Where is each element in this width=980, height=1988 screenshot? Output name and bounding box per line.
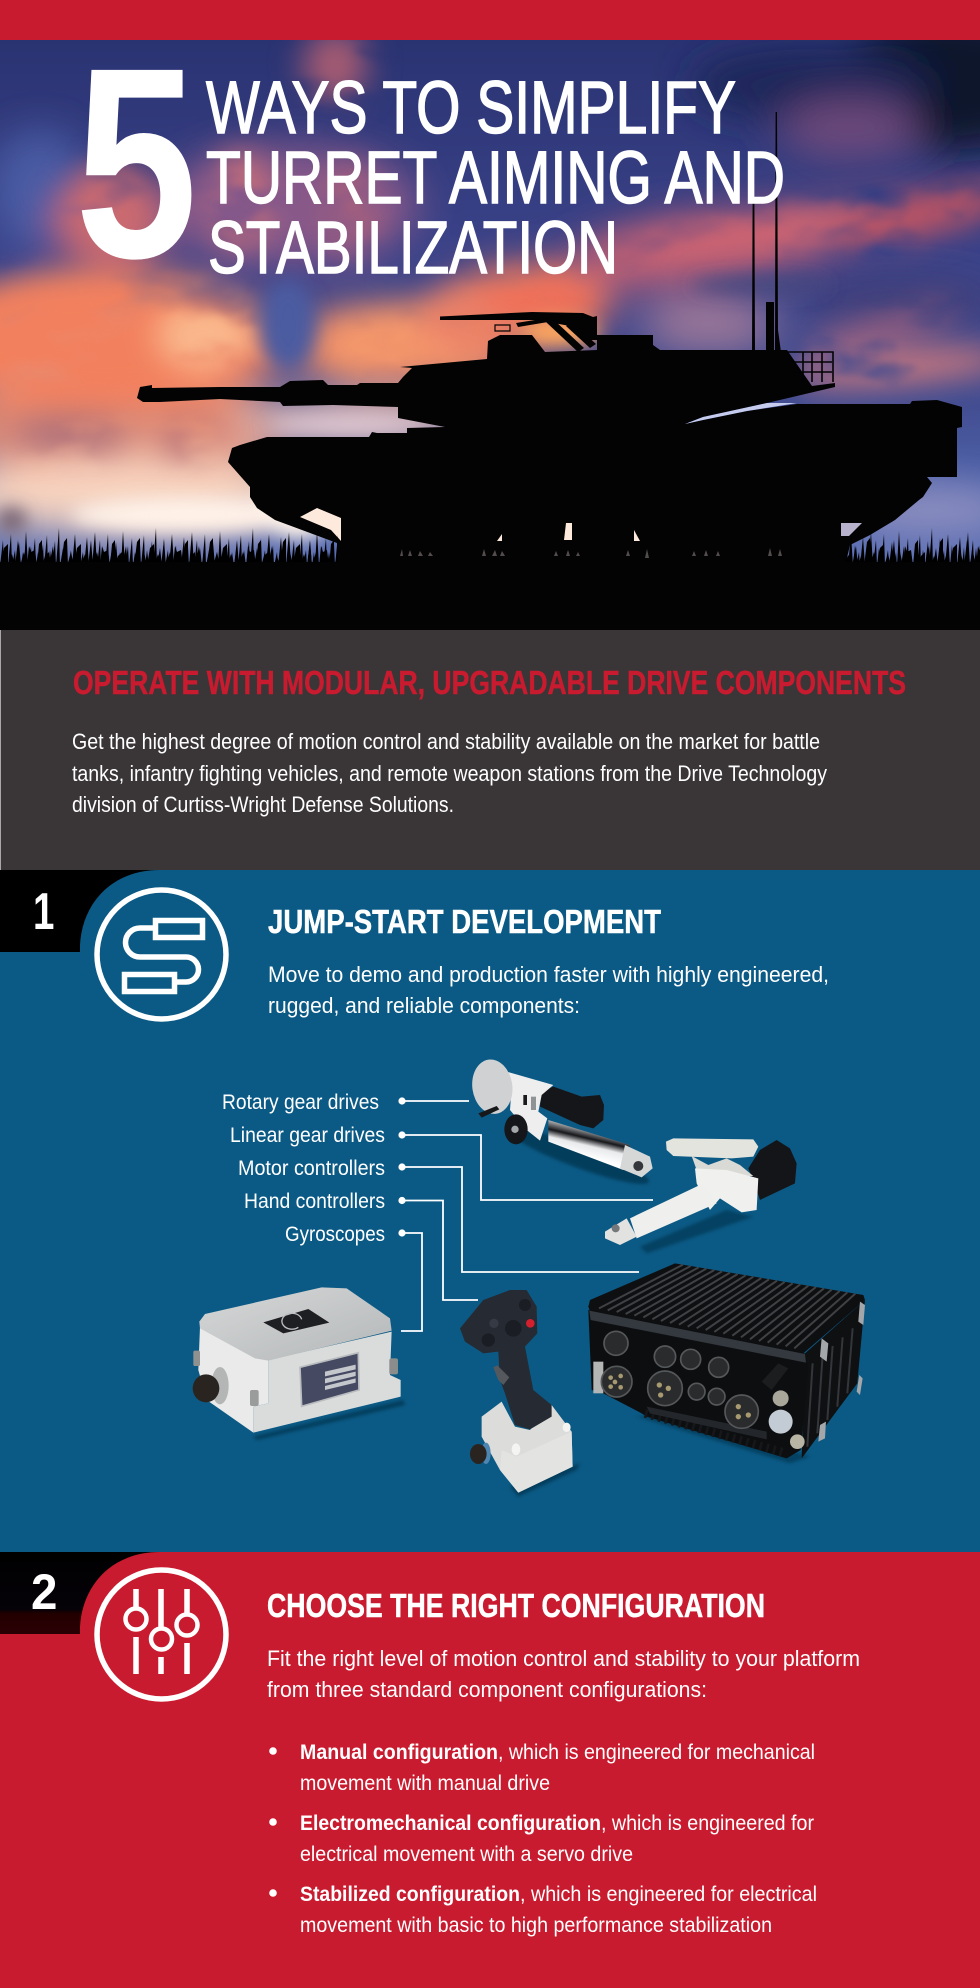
number tab 1: [0, 870, 160, 953]
section 2 heading: CHOOSE THE RIGHT CONFIGURATION: [267, 1587, 765, 1624]
intro text: division of Curtiss-Wright Defense Solutions.: [72, 792, 454, 817]
number tab 2: 2: [31, 1565, 57, 1620]
panel: section 2 choose the right configuration: [0, 1552, 980, 1988]
bullet: electromechanical configuration: electrical movement with a servo drive: [300, 1843, 633, 1866]
title: TURRET AIMING AND: [206, 136, 785, 219]
grass and ground: [0, 526, 980, 630]
leader lines: [398, 1097, 653, 1331]
bullet: stabilized configuration: [269, 1883, 817, 1937]
tank sky gaps: [300, 403, 862, 541]
bullet: stabilized configuration: movement with basic to high performance stabilization: [300, 1914, 772, 1937]
section 1 text: Move to demo and production faster with highly engineered,: [268, 962, 829, 987]
section 2 text: [267, 1646, 860, 1702]
component list labels: Gyroscopes: [285, 1222, 385, 1246]
bullet: manual configuration: movement with manual drive: [300, 1772, 550, 1795]
title: STABILIZATION: [208, 206, 618, 289]
bullet: manual configuration: Manual configuration: [300, 1741, 498, 1764]
product: rotary gear drive: [469, 1057, 653, 1192]
title: WAYS TO SIMPLIFY: [206, 66, 736, 149]
number tab 2: [0, 1552, 160, 1635]
product: linear gear drive: [605, 1138, 797, 1253]
panel: section 1 jump-start development: [0, 870, 980, 1552]
sunset sky: [0, 40, 980, 562]
number tab 1: 1: [33, 882, 54, 940]
section 2 text: Fit the right level of motion control and stability to your platform: [267, 1646, 860, 1671]
intro text: Get the highest degree of motion control and stability available on the market for battle: [72, 729, 820, 754]
bullet: electromechanical configuration: [269, 1812, 814, 1866]
hero panel: tank at sunset: [0, 10, 980, 630]
section 2 text: from three standard component configurations:: [267, 1677, 707, 1702]
panel: intro: [0, 630, 980, 870]
tank silhouette: [137, 112, 962, 566]
big numeral 5: 5: [75, 12, 198, 315]
title: [206, 66, 785, 289]
bullet: electromechanical configuration: , which is engineered for: [601, 1812, 814, 1835]
intro text: [72, 729, 827, 817]
section 1 text: rugged, and reliable components:: [268, 993, 580, 1018]
component list labels: Hand controllers: [244, 1189, 385, 1213]
icon: cable with connectors: [97, 890, 226, 1019]
section 1 heading: JUMP-START DEVELOPMENT: [268, 903, 661, 940]
section 1 text: [268, 962, 829, 1018]
product: motor controller: [588, 1263, 865, 1463]
component list labels: Rotary gear drives: [222, 1090, 379, 1114]
bullet: stabilized configuration: , which is engineered for electrical: [520, 1883, 817, 1906]
bullet: manual configuration: , which is engineered for mechanical: [498, 1741, 815, 1764]
component list labels: Linear gear drives: [230, 1123, 385, 1147]
bullet: manual configuration: [269, 1741, 815, 1795]
bullet: stabilized configuration: Stabilized configuration: [300, 1883, 520, 1906]
intro text: tanks, infantry fighting vehicles, and remote weapon stations from the Drive Technology: [72, 761, 827, 786]
bullet: electromechanical configuration: Electromechanical configuration: [300, 1812, 601, 1835]
product: hand controller: [460, 1290, 580, 1497]
top red band: [0, 0, 980, 40]
component list labels: [222, 1090, 385, 1246]
component list labels: Motor controllers: [238, 1156, 385, 1180]
product: gyroscope: [193, 1287, 405, 1440]
icon: slider controls: [97, 1570, 226, 1699]
